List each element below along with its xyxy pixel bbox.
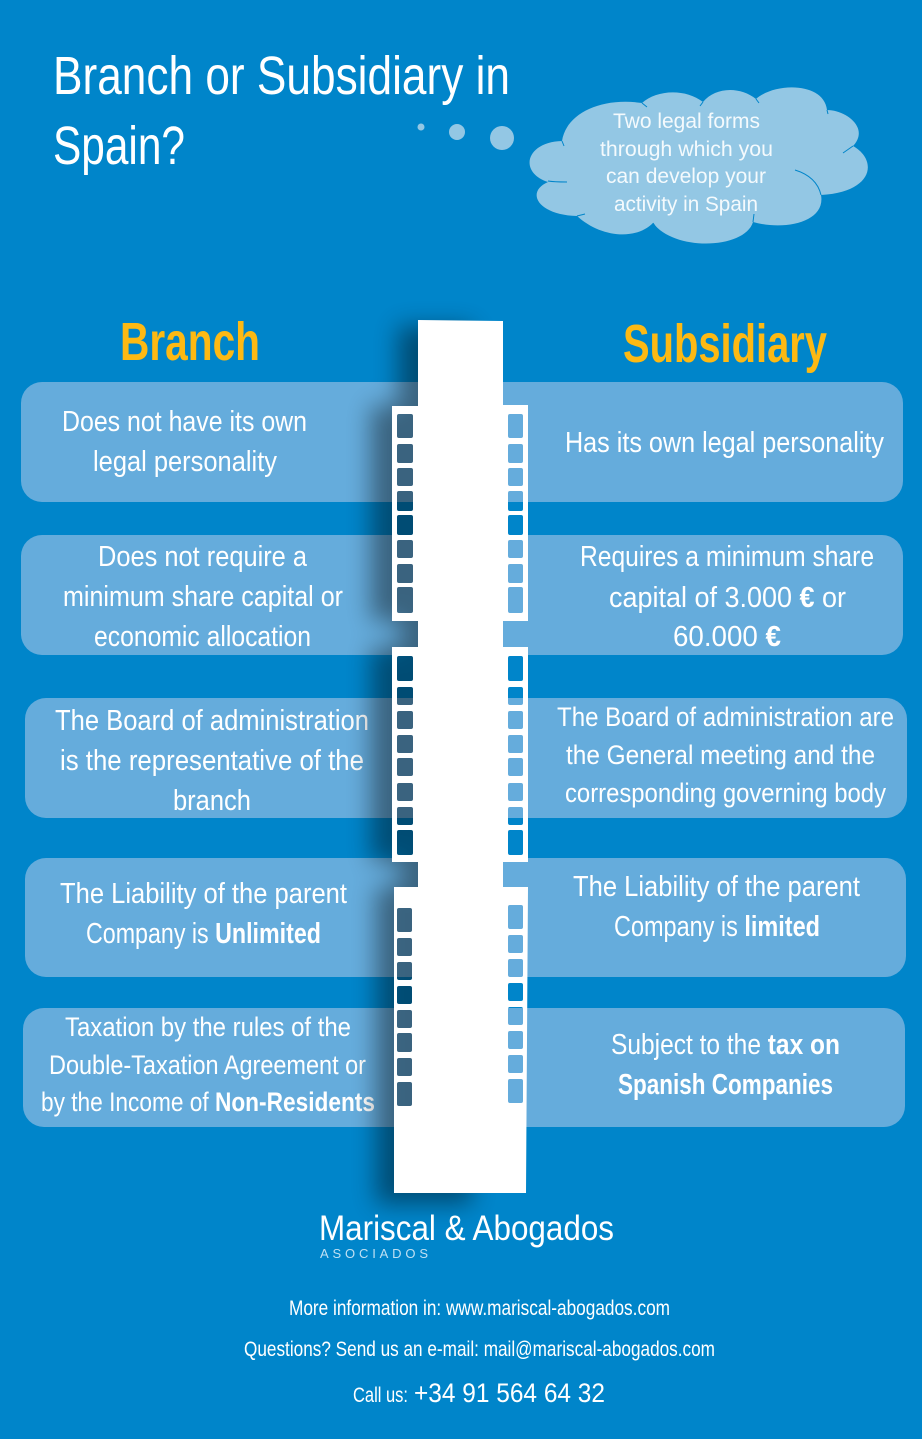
icon: white tower building — [392, 320, 528, 1193]
panel: subsidiary taxation: Subject to the tax on — [611, 1029, 840, 1061]
panel: subsidiary share capital: Requires a minimum share — [580, 541, 874, 573]
panel: branch taxation: by the Income of Non-Residents — [41, 1087, 375, 1117]
contact information: More information in: www.mariscal-abogados.com — [289, 1297, 670, 1320]
callout: thought cloud: through which you — [600, 138, 773, 161]
panel: branch taxation — [23, 1008, 461, 1127]
panel: branch board of administration: branch — [173, 785, 251, 817]
panel: branch board of administration: is the representative of the — [60, 745, 364, 777]
contact information: Call us: — [353, 1384, 408, 1407]
panel: branch taxation: Double-Taxation Agreement or — [49, 1050, 366, 1080]
callout: thought cloud: activity in Spain — [614, 193, 758, 216]
panel: branch liability: Company is Unlimited — [86, 918, 321, 950]
panel: subsidiary taxation: Spanish Companies — [618, 1069, 833, 1101]
logo: Mariscal & Abogados — [319, 1209, 614, 1261]
callout: thought cloud: Two legal forms — [613, 110, 760, 133]
title — [53, 46, 510, 176]
panel: branch legal personality: legal personality — [93, 446, 277, 478]
callout: thought cloud — [530, 87, 868, 244]
contact information — [244, 1297, 715, 1408]
panel: subsidiary legal personality — [461, 382, 903, 502]
panel: subsidiary liability: Company is limited — [614, 911, 820, 943]
logo: Mariscal & Abogados: ASOCIADOS — [320, 1246, 428, 1261]
panel: subsidiary taxation — [461, 1008, 905, 1127]
callout: thought cloud: can develop your — [606, 165, 766, 188]
panel: subsidiary share capital: 60.000 € — [673, 621, 781, 653]
title: Spain? — [53, 116, 185, 176]
panel: subsidiary share capital: capital of 3.000 € or — [609, 582, 846, 614]
title: Branch or Subsidiary in — [53, 46, 510, 106]
thought bubble dots — [418, 124, 514, 150]
panel: branch share capital: minimum share capital or — [63, 581, 343, 613]
panel: branch legal personality — [21, 382, 461, 502]
panel: subsidiary board of administration: the General meeting and the — [566, 740, 875, 770]
panel: branch liability: The Liability of the parent — [60, 878, 347, 910]
panel: subsidiary board of administration: corresponding governing body — [565, 778, 886, 808]
panel: branch legal personality: Does not have its own — [62, 406, 307, 438]
tower shadow — [371, 326, 472, 1204]
panel: subsidiary liability — [461, 858, 906, 977]
panel: branch board of administration — [25, 698, 461, 818]
panel: branch liability — [25, 858, 461, 977]
panel: subsidiary board of administration — [461, 698, 907, 818]
panel: subsidiary liability: The Liability of the parent — [573, 871, 860, 903]
panel: branch share capital: economic allocation — [94, 621, 311, 653]
contact information: Questions? Send us an e-mail: mail@mariscal-abogados.com — [244, 1338, 715, 1361]
contact information: +34 91 564 64 32 — [414, 1378, 605, 1408]
panel: branch share capital — [21, 535, 461, 655]
panel: branch board of administration: The Board of administration — [55, 705, 369, 737]
panel: branch share capital: Does not require a — [98, 541, 308, 573]
panel: subsidiary legal personality: Has its own legal personality — [565, 427, 884, 459]
heading: Subsidiary: Subsidiary — [623, 314, 827, 374]
logo: Mariscal & Abogados: Mariscal & Abogados — [319, 1209, 614, 1248]
panel: branch taxation: Taxation by the rules of the — [65, 1012, 351, 1042]
heading: Branch: Branch — [120, 312, 260, 372]
panel: subsidiary share capital — [461, 535, 903, 655]
